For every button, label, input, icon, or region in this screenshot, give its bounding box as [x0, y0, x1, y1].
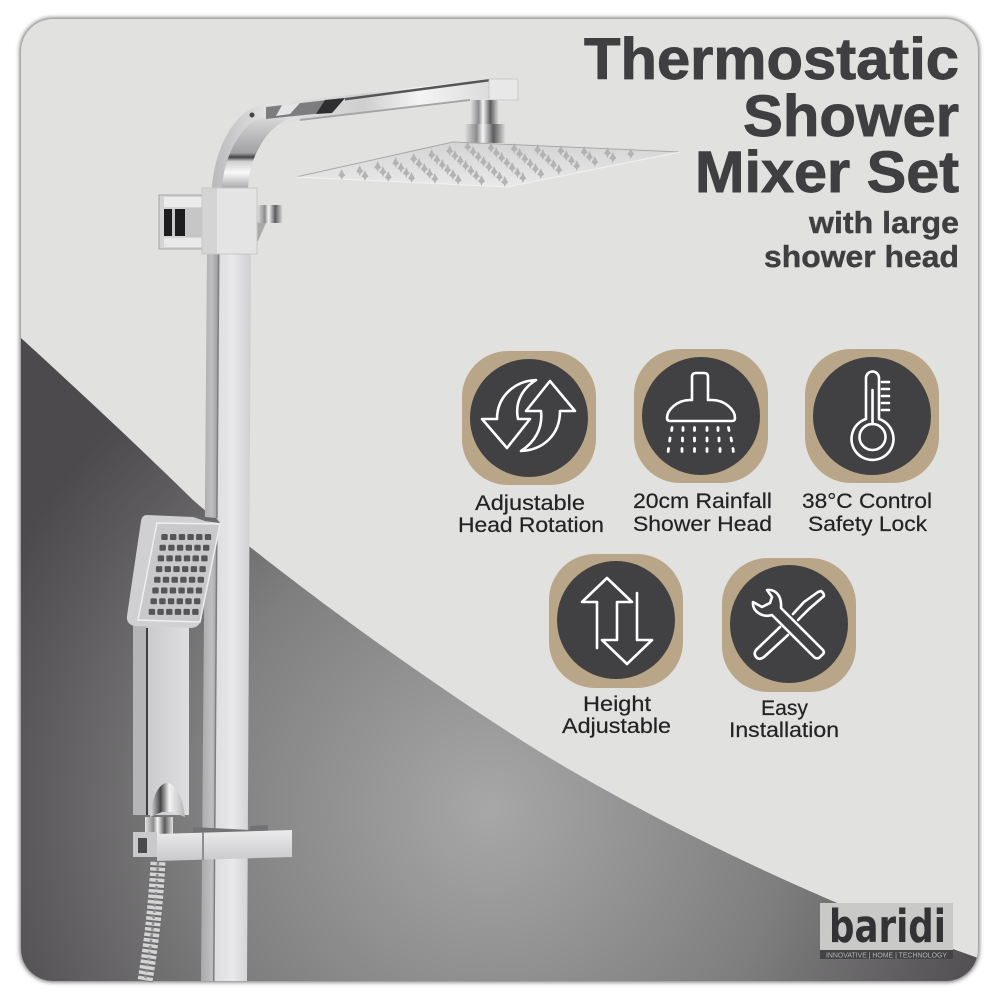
large square shower head: [296, 141, 680, 187]
icon: thermometer: [805, 349, 939, 483]
feature: temperature control: [802, 349, 939, 536]
label: [633, 490, 772, 536]
label: 20cm Rainfall: [633, 490, 772, 513]
label: Adjustable: [562, 715, 671, 738]
slider bracket: [133, 783, 292, 861]
label: Shower Head: [633, 513, 772, 536]
title: Mixer Set: [695, 140, 959, 205]
label: [562, 693, 671, 738]
label: Head Rotation: [458, 514, 604, 537]
icon: up and down arrows: [549, 554, 683, 688]
subtitle: [764, 205, 959, 274]
hand shower handle: [133, 625, 189, 815]
label: Installation: [729, 719, 839, 742]
icon: rotation arrows: [462, 351, 596, 485]
head neck and collar: [464, 100, 506, 143]
title: Shower: [743, 84, 959, 149]
feature: rainfall shower head: [633, 349, 772, 536]
label: [729, 697, 839, 742]
label: [802, 490, 932, 536]
hose: [145, 862, 158, 981]
wall bracket: [159, 195, 203, 249]
label: Safety Lock: [808, 513, 928, 536]
label: Height: [583, 693, 651, 716]
label: Adjustable: [475, 492, 585, 515]
column top block: [202, 188, 257, 254]
feature: adjustable head rotation: [458, 351, 604, 537]
label: Easy: [761, 697, 809, 720]
curved shower arm: [212, 79, 518, 188]
side knob: [257, 205, 283, 241]
logo: baridi: INNOVATIVE | HOME | TECHNOLOGY: [826, 952, 947, 960]
feature: height adjustable: [549, 554, 683, 738]
title: Thermostatic: [584, 27, 959, 92]
subtitle: with large: [808, 205, 959, 240]
subtitle: shower head: [764, 239, 959, 274]
shower rail product: [127, 79, 680, 981]
rail column: [201, 254, 251, 981]
label: [458, 492, 604, 537]
logo: baridi: baridi: [829, 900, 946, 953]
label: 38°C Control: [802, 490, 932, 513]
dark curved background: [21, 338, 978, 981]
feature: easy installation: [722, 558, 856, 742]
icon: shower: [634, 349, 768, 483]
hand shower head: [127, 515, 220, 628]
icon: wrench and screwdriver: [722, 558, 856, 692]
title: [584, 27, 959, 205]
